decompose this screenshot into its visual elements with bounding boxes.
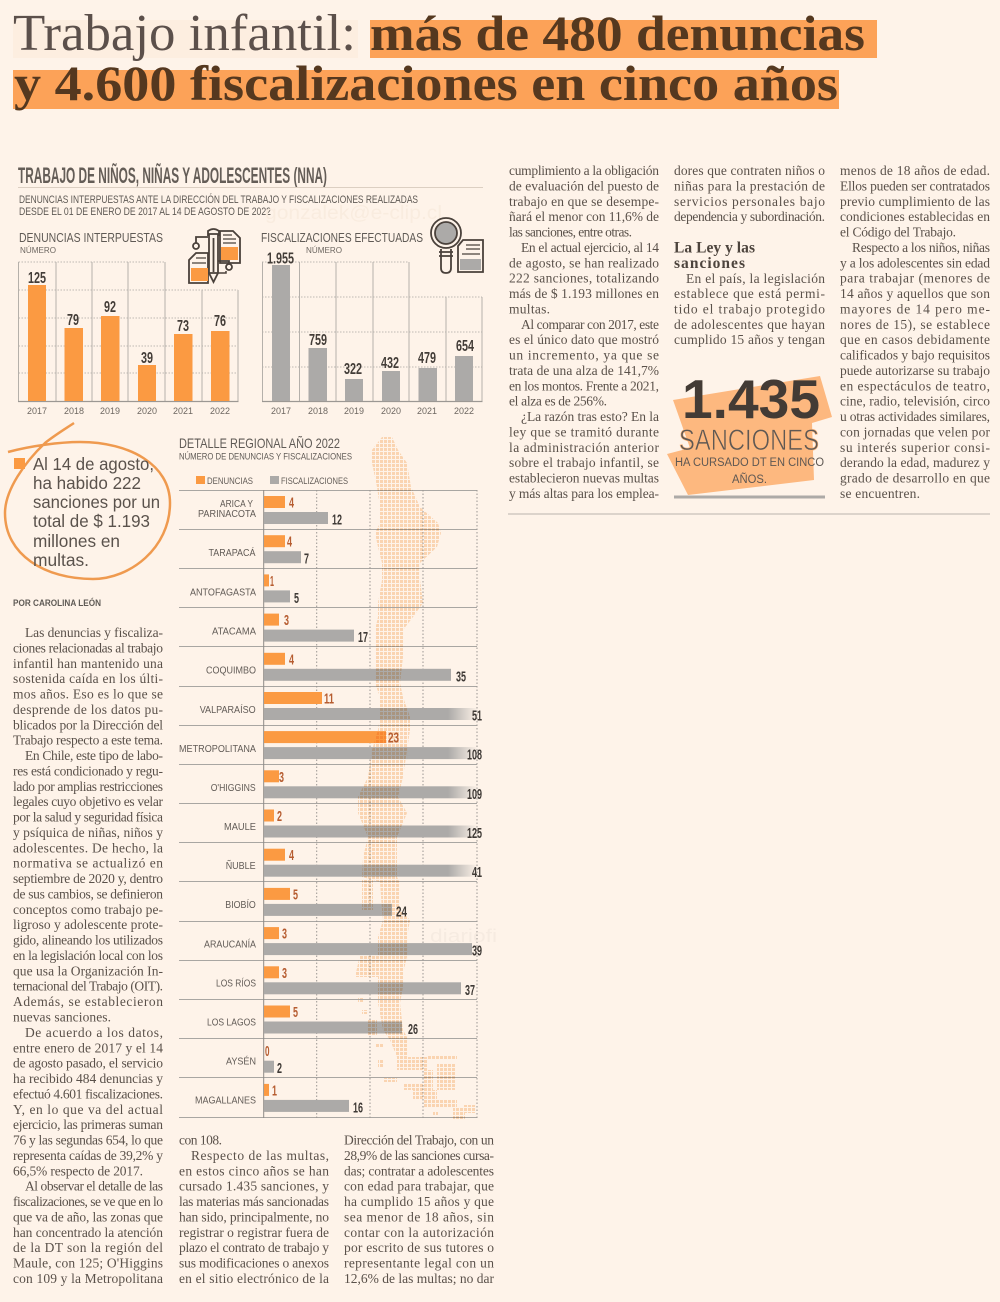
callout text: millones en <box>33 531 120 551</box>
fiscalizaciones values: 108 <box>467 747 482 764</box>
bar chart: denuncias interpuestas: 2019 <box>100 406 120 417</box>
body text column 1: entre enero de 2017 y el 14 <box>13 1040 163 1055</box>
body text column 4: y más altas para los emplea- <box>509 486 660 501</box>
body text column 6: mayores de 14 pero me- <box>840 301 990 316</box>
body text column 3 <box>344 1132 494 1286</box>
grey bars <box>264 512 478 1112</box>
body text column 2: registrar o registrar fuera de <box>179 1225 329 1240</box>
bar chart: fiscalizaciones efectuadas: 654 <box>456 338 474 355</box>
fiscalizaciones values: 5 <box>294 590 299 607</box>
body text column 4: multas. <box>509 301 550 316</box>
bar chart: denuncias interpuestas <box>18 230 238 417</box>
body text column 1: En Chile, este tipo de labo- <box>25 748 164 763</box>
body text column 1: Maule, con 125; O'Higgins <box>13 1256 163 1271</box>
body text column 5: En el país, la legislación <box>686 271 825 286</box>
bar chart: fiscalizaciones efectuadas: 1.955 <box>267 250 294 268</box>
body text column 2: las materias más sancionadas <box>179 1194 329 1209</box>
fiscalizaciones values: 2 <box>277 1060 282 1077</box>
infographic subtitle <box>19 193 418 218</box>
title: más de 480 denuncias <box>370 5 865 61</box>
bar chart: denuncias interpuestas: 79 <box>67 312 79 329</box>
body text column 1: septiembre de 2020 y, dentro <box>13 871 163 886</box>
infographic subtitle: DESDE EL 01 DE ENERO DE 2017 AL 14 DE AGOSTO DE 2022 <box>19 206 271 218</box>
body text column 4: la administración anterior <box>509 440 660 455</box>
denuncias values: 5 <box>293 886 298 903</box>
regional chart <box>179 430 482 1125</box>
body text column 6: u otras actividades similares, <box>840 409 990 424</box>
fiscalizaciones values: 12 <box>332 512 342 528</box>
bar chart: denuncias interpuestas: 73 <box>177 318 189 335</box>
fiscalizaciones values: 7 <box>304 551 309 568</box>
body text column 1: representa caídas de 39,2% y <box>13 1148 163 1163</box>
callout text: multas. <box>33 550 89 570</box>
icon: magnifying glass and document <box>431 218 483 273</box>
denuncias values: 3 <box>282 926 287 943</box>
body text column 6: 14 años y aquellos que son <box>840 286 990 301</box>
body text column 4: más de $ 1.193 millones en <box>509 286 659 301</box>
body text column 6: el Código del Trabajo. <box>840 224 956 240</box>
body text column 1: Al observar el detalle de las <box>25 1179 163 1194</box>
body text column 6: Respecto a los niños, niñas <box>852 240 990 255</box>
body text column 4: de agosto, se han realizado <box>509 255 659 270</box>
body text column 3: contar con la autorización <box>344 1225 494 1240</box>
bar chart: fiscalizaciones efectuadas: 2019 <box>344 406 364 417</box>
body text column 3: Dirección del Trabajo, con un <box>344 1132 494 1148</box>
legend: DENUNCIAS <box>207 476 253 487</box>
chart heading: fiscalizaciones: FISCALIZACIONES EFECTUADAS <box>261 230 423 245</box>
body text column 4: 222 sanciones, totalizando <box>509 271 659 286</box>
body text column 1: Y, en lo que va del actual <box>13 1102 163 1117</box>
body text column 1: 66,5% respecto de 2017. <box>13 1163 143 1178</box>
stat callout: 1.435 sanciones <box>667 368 832 498</box>
body text column 2: han sido, principalmente, no <box>179 1209 329 1224</box>
byline: POR CAROLINA LEÓN <box>13 597 101 608</box>
body text column 4: trabajo en que se desempe- <box>509 194 660 209</box>
body text column 1: gido, alineando los utilizados <box>13 933 163 948</box>
region labels <box>179 498 256 1106</box>
body text column 1: ciones relacionadas al trabajo <box>13 640 163 655</box>
body text column 5: servicios personales bajo <box>674 194 825 209</box>
body text column 6: condiciones establecidas en <box>840 209 990 224</box>
body text column 6: con jornadas que velen por <box>840 424 990 440</box>
body text column 6: se encuentren. <box>840 486 920 501</box>
body text column 1: ligroso y adolescente prote- <box>13 917 164 932</box>
callout bullet <box>14 458 25 469</box>
regional heading <box>179 435 352 462</box>
bar chart: fiscalizaciones efectuadas: 322 <box>344 361 362 378</box>
stat callout: 1.435 sanciones: AÑOS. <box>732 473 767 486</box>
denuncias values: 4 <box>289 494 294 512</box>
body text column 4: establecieron nuevas multas <box>509 471 659 486</box>
body text column 6: Ellos pueden ser contratados <box>840 178 990 193</box>
body text column 4: de evaluación del puesto de <box>509 178 659 193</box>
body text column 1: normativa se actualizó en <box>13 856 163 871</box>
body text column 6: previo cumplimiento de las <box>840 194 990 209</box>
body text column 4: ley que se tramitó durante <box>509 424 659 440</box>
fiscalizaciones values: 39 <box>472 943 482 960</box>
body text column 1: conceptos como trabajo pe- <box>13 902 164 917</box>
body text column 4: las sanciones, entre otras. <box>509 224 632 240</box>
region labels: MAGALLANES <box>195 1094 256 1106</box>
denuncias values: 1 <box>272 1082 277 1099</box>
denuncias values: 4 <box>289 651 294 668</box>
title <box>13 5 877 111</box>
body text column 4: ñará el menor con 11,6% de <box>509 209 659 224</box>
region labels: ANTOFAGASTA <box>190 586 256 598</box>
region labels: BIOBÍO <box>225 898 256 911</box>
bar chart: denuncias interpuestas: 125 <box>28 270 46 287</box>
body text column 1: ternacional del Trabajo (OIT). <box>13 979 163 994</box>
bar chart: fiscalizaciones efectuadas: 2021 <box>417 406 437 417</box>
denuncias values: 2 <box>277 808 282 825</box>
body text column 6: para trabajar (menores de <box>840 271 990 286</box>
region labels: LOS RÍOS <box>216 976 256 990</box>
denuncias values: 5 <box>293 1004 298 1021</box>
map of Chile <box>356 437 475 1119</box>
body text column 5 <box>674 163 826 347</box>
body text column 3: sea menor de 18 años, sin <box>344 1209 494 1224</box>
legend: FISCALIZACIONES <box>281 476 348 487</box>
orange bars <box>264 496 386 1096</box>
title: y 4.600 fiscalizaciones en cinco años <box>14 55 838 111</box>
body text column 4: es el único dato que mostró <box>509 332 659 347</box>
body text column 1: ejercicio, las primeras suman <box>13 1117 163 1132</box>
body text column 4: el alza es de 256%. <box>509 394 607 409</box>
body text column 4: En el actual ejercicio, al 14 <box>521 240 659 255</box>
body text column 5: de adolescentes que hayan <box>674 317 825 332</box>
body text column 1: y psíquica de niñas, niños y <box>13 825 163 840</box>
body text column 4: Al comparar con 2017, este <box>521 317 659 332</box>
chart heading: fiscalizaciones <box>261 230 423 255</box>
region labels: ÑUBLE <box>226 859 256 872</box>
region labels: PARINACOTA <box>198 508 256 520</box>
bar chart: fiscalizaciones efectuadas: 432 <box>381 355 399 372</box>
body text column 3: por escrito de sus tutores o <box>344 1240 494 1255</box>
chart heading: denuncias: NÚMERO <box>20 245 56 255</box>
body text column 3: 28,9% de las sanciones cursa- <box>344 1148 494 1163</box>
section heading <box>674 240 755 272</box>
body text column 1: que va de año, las zonas que <box>13 1209 163 1224</box>
infographic heading: TRABAJO DE NIÑOS, NIÑAS Y ADOLESCENTES (NNA) <box>18 163 327 188</box>
region labels: O'HIGGINS <box>211 782 256 794</box>
denuncias values: 4 <box>289 847 294 864</box>
body text column 1: infantil han mantenido una <box>13 656 163 671</box>
callout text: total de $ 1.193 <box>33 511 150 531</box>
bar chart: denuncias interpuestas: 2017 <box>27 406 47 417</box>
body text column 1: efectuó 4.601 fiscalizaciones. <box>13 1086 163 1101</box>
body text column 1: legales cuyo objetivo es velar <box>13 794 164 809</box>
region labels: ARICA Y <box>220 498 253 510</box>
bar chart: fiscalizaciones efectuadas: 2020 <box>381 406 401 417</box>
bar chart: denuncias interpuestas: 2018 <box>64 406 84 417</box>
callout text: sanciones por un <box>33 492 160 512</box>
bar chart: denuncias interpuestas: 39 <box>141 350 153 367</box>
stat callout: 1.435 sanciones: SANCIONES <box>679 424 819 457</box>
body text column 4: un incremento, ya que se <box>509 348 659 363</box>
body text column 1: blicados por la Dirección del <box>13 717 163 732</box>
body text column 6: grado de desarrollo en que <box>840 471 990 486</box>
denuncias values: 11 <box>324 690 334 708</box>
body text column 1: de agosto pasado, el servicio <box>13 1056 163 1071</box>
section heading: La Ley y las <box>674 240 755 256</box>
body text column 1: fiscalizaciones, se ve que en lo <box>13 1194 163 1209</box>
body text column 3: representante legal con un <box>344 1256 494 1271</box>
body text column 6: cine, radio, televisión, circo <box>840 394 990 409</box>
body text column 6: derando la edad, madurez y <box>840 455 990 470</box>
regional heading: DETALLE REGIONAL AÑO 2022 <box>179 435 340 451</box>
region labels: METROPOLITANA <box>179 743 256 755</box>
fiscalizaciones values <box>277 512 482 1116</box>
body text column 4 <box>509 163 660 501</box>
body text column 1: De acuerdo a los datos, <box>25 1025 163 1040</box>
denuncias values: 23 <box>388 730 399 747</box>
body text column 2: cursado 1.435 sanciones, y <box>179 1179 329 1194</box>
fiscalizaciones values: 41 <box>472 864 482 881</box>
region labels: ATACAMA <box>212 626 256 638</box>
body text column 1: 76 y las segundas 654, lo que <box>13 1132 163 1148</box>
denuncias values: 3 <box>284 612 289 629</box>
body text column 4: trata de una alza de 141,7% <box>509 363 659 378</box>
chart heading: fiscalizaciones: NÚMERO <box>306 245 342 255</box>
legend <box>196 476 348 487</box>
body text column 4: sobre el trabajo infantil, se <box>509 455 659 470</box>
denuncias values: 0 <box>265 1043 270 1060</box>
body text column 1: por la salud y seguridad física <box>13 810 163 825</box>
body text column 6: y a los adolescentes sin edad <box>840 255 990 270</box>
body text column 1 <box>13 625 164 1286</box>
bar chart: fiscalizaciones efectuadas <box>261 230 482 417</box>
bar chart: fiscalizaciones efectuadas: 479 <box>418 350 436 367</box>
icon: documents and pencil <box>189 229 240 283</box>
fiscalizaciones values: 24 <box>396 903 407 920</box>
body text column 1: de la DT son la región del <box>13 1240 163 1255</box>
body text column 1: han concentrado la atención <box>13 1225 163 1240</box>
bar chart: denuncias interpuestas: 2022 <box>210 406 230 417</box>
body text column 1: con 109 y la Metropolitana <box>13 1271 163 1286</box>
body text column 3: con edad para trabajar, que <box>344 1179 494 1194</box>
infographic subtitle: DENUNCIAS INTERPUESTAS ANTE LA DIRECCIÓN DEL TRABAJO Y FISCALIZACIONES REALIZADAS <box>19 193 418 206</box>
body text column 5: tido el trabajo protegido <box>674 301 825 316</box>
body text column 5: dependencia y subordinación. <box>674 209 825 224</box>
body text column 6: nores de 15), se establece <box>840 317 990 332</box>
callout ring <box>5 423 170 579</box>
body text column 3: ha cumplido 15 años y que <box>344 1194 494 1209</box>
stat callout: 1.435 sanciones: HA CURSADO DT EN CINCO <box>675 457 824 469</box>
denuncias values: 4 <box>287 534 292 551</box>
body text column 1: desprende de los datos pu- <box>13 702 164 717</box>
body text column 2: Respecto de las multas, <box>191 1148 329 1163</box>
body text column 5: dores que contraten niños o <box>674 163 825 178</box>
body text column 2: en el sitio electrónico de la <box>179 1271 329 1286</box>
fiscalizaciones values: 35 <box>456 668 466 685</box>
bar chart: fiscalizaciones efectuadas: 2017 <box>271 406 291 417</box>
body text column 3: das; contratar a adolescentes <box>344 1163 494 1178</box>
bar chart: denuncias interpuestas: 2021 <box>173 406 193 417</box>
body text column 2: sus modificaciones o anexos <box>179 1256 329 1271</box>
callout text <box>33 454 160 570</box>
region labels: MAULE <box>224 821 256 833</box>
body text column 1: Trabajo respecto a este tema. <box>13 733 163 748</box>
body text column 1: de sus cambios, se definieron <box>13 886 163 902</box>
fiscalizaciones values: 37 <box>465 982 475 999</box>
body text column 2 <box>179 1132 329 1286</box>
denuncias values: 1 <box>270 573 274 590</box>
body text column 1: res está condicionado y regu- <box>13 763 164 778</box>
denuncias values: 3 <box>279 769 284 786</box>
region labels: LOS LAGOS <box>207 1016 256 1028</box>
region labels: VALPARAÍSO <box>200 703 256 716</box>
body text column 2: con 108. <box>179 1132 222 1148</box>
body text column 6: su interés superior consi- <box>840 440 990 455</box>
body text column 1: nuevas sanciones. <box>13 1010 111 1024</box>
body text column 6: que en casos debidamente <box>840 332 990 347</box>
body text column 1: Las denuncias y fiscaliza- <box>25 625 164 640</box>
title: Trabajo infantil: <box>13 5 356 62</box>
body text column 5: establece que está permi- <box>674 286 826 301</box>
fiscalizaciones values: 51 <box>472 708 482 724</box>
body text column 6: en espectáculos de teatro, <box>840 378 990 393</box>
region labels: AYSÉN <box>226 1054 256 1068</box>
regional heading: NÚMERO DE DENUNCIAS Y FISCALIZACIONES <box>179 452 352 462</box>
body text column 1: adolescentes. De hecho, la <box>13 840 163 855</box>
watermark: diariofi <box>430 926 497 946</box>
region labels: ARAUCANÍA <box>204 938 256 950</box>
body text column 1: mos años. Eso es lo que se <box>13 686 163 702</box>
body text column 1: ha recibido 484 denuncias y <box>13 1071 163 1086</box>
body text column 1: lado por amplias restricciones <box>13 779 163 794</box>
bar chart: fiscalizaciones efectuadas: 2022 <box>454 406 474 417</box>
body text column 5: cumplido 15 años y tengan <box>674 332 825 347</box>
body text column 2: plazo el contrato de trabajo y <box>179 1240 329 1255</box>
fiscalizaciones values: 125 <box>467 825 482 842</box>
body text column 1: sostenida caída en los últi- <box>13 671 164 686</box>
bar chart: denuncias interpuestas: 2020 <box>137 406 157 417</box>
bar chart: fiscalizaciones efectuadas: 2018 <box>308 406 328 417</box>
callout <box>5 423 170 579</box>
region labels: COQUIMBO <box>206 664 256 676</box>
chart heading: denuncias <box>19 230 163 255</box>
body text column 1: en la legislación local con los <box>13 948 163 963</box>
chart heading: denuncias: DENUNCIAS INTERPUESTAS <box>19 230 163 245</box>
bar chart: denuncias interpuestas: 76 <box>214 313 226 330</box>
bar chart: fiscalizaciones efectuadas: 759 <box>309 332 327 349</box>
body text column 6 <box>840 163 990 501</box>
stat callout: 1.435 sanciones: 1.435 <box>682 368 820 430</box>
fiscalizaciones values: 16 <box>353 1099 363 1116</box>
section heading: sanciones <box>674 255 745 272</box>
region labels: TARAPACÁ <box>208 546 256 559</box>
body text column 2: en estos cinco años se han <box>179 1163 329 1178</box>
watermark: gonzalek@e-clip.cl <box>265 203 442 224</box>
callout text: ha habido 222 <box>33 473 141 493</box>
body text column 6: puede autorizarse su trabajo <box>840 363 990 378</box>
body text column 1: que usa la Organización In- <box>13 963 164 978</box>
fiscalizaciones values: 17 <box>358 629 368 646</box>
body text column 1: Además, se establecieron <box>13 994 163 1009</box>
body text column 3: 12,6% de las multas; no dar <box>344 1271 494 1286</box>
callout text: Al 14 de agosto, <box>33 454 154 474</box>
fiscalizaciones values: 26 <box>408 1021 418 1038</box>
body text column 6: menos de 18 años de edad. <box>840 163 990 178</box>
body text column 6: calificados y bajo requisitos <box>840 348 990 363</box>
body text column 4: ¿La razón tras esto? En la <box>521 409 659 424</box>
bar chart: denuncias interpuestas: 92 <box>104 299 116 316</box>
fiscalizaciones values: 109 <box>467 786 482 803</box>
body text column 4: en los montos. Frente a 2021, <box>509 378 659 393</box>
denuncias values: 3 <box>282 965 287 982</box>
denuncias values <box>265 494 399 1099</box>
body text column 5: niñas para la prestación de <box>674 178 825 193</box>
body text column 4: cumplimiento a la obligación <box>509 163 659 178</box>
